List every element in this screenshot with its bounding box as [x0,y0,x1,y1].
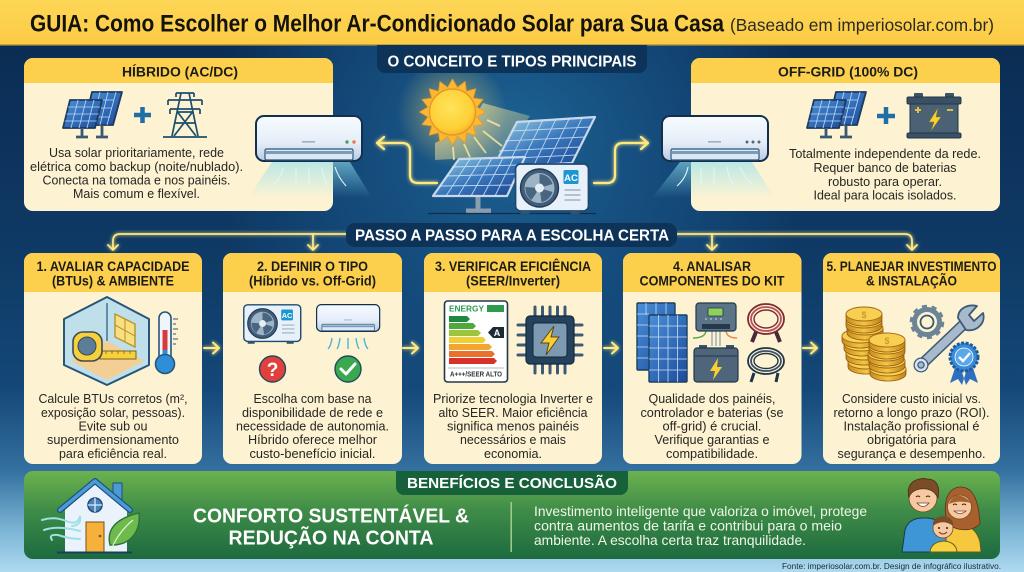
icon: black cable [748,348,784,382]
text: off-grid description: robusto para operar. [828,174,942,189]
text: step 4 description: Qualidade dos painéis, [648,391,776,406]
text: step 3 description: alto SEER. Maior eficiência [438,405,588,420]
title bar: (Baseado em imperiosolar.com.br) [730,15,994,35]
text: step 3 description: economia. [484,446,542,461]
text: step 5 description: Considere custo inicial vs. [842,391,981,406]
text: hybrid description: Usa solar prioritariamente, rede [49,145,224,160]
text: step 1 description: para eficiência real. [59,446,167,461]
icon: outdoor unit [244,305,301,344]
text: benefits description: ambiente. A escolha certa traz tranquilidade. [534,532,806,548]
panel: hybrid [24,58,333,211]
icon: energy label: ENERGY [449,304,484,314]
text: step 1 description [38,391,188,461]
text: step 1 description: Evite sub ou [78,418,148,434]
icon: hybrid air conditioner with airflow [248,116,372,198]
text: benefits description: contra aumentos de tarifa e contribui para o meio [534,518,842,534]
icon: coin stacks: $ [884,336,890,346]
panel: step 4: 4. ANALISAR [673,259,751,275]
section heading: step by step: PASSO A PASSO PARA A ESCOLHA CERTA [355,228,669,244]
panel: benefits and conclusion [24,471,1000,559]
icon: plus [877,107,895,124]
section heading: concept: O CONCEITO E TIPOS PRINCIPAIS [388,54,637,70]
heading: benefits [396,471,628,495]
panel: step 3: (SEER/Inverter) [466,274,560,290]
text: benefits description: Investimento inteligente que valoriza o imóvel, protege [534,503,867,519]
icon: inverter chip [518,307,582,373]
section heading: step by step [346,223,677,247]
heading: comfort: CONFORTO SUSTENTÁVEL & [193,504,469,528]
panel: step 1: (BTUs) & AMBIENTE [52,274,174,290]
icon: transmission tower [163,93,207,137]
panel: step 2 [223,253,402,464]
arrow: sun system to hybrid AC [377,137,437,183]
text: step 1 description: Calcule BTUs corretos (m², [38,391,188,406]
icon: battery [907,93,961,138]
text: step 4 description: compatibilidade. [666,446,758,461]
icon: indoor unit [317,305,380,349]
panel: step 2: 2. DEFINIR O TIPO [257,259,368,275]
panel: step 1: 1. AVALIAR CAPACIDADE [36,259,190,275]
icon: coin stacks: $ [861,310,867,320]
icon: thermometer [156,312,178,374]
icon: red cable [748,304,784,342]
text: hybrid description: Mais comum e flexível. [73,186,200,201]
text: step 5 description: Instalação profissional é [844,418,980,434]
text: step 4 description: controlador e baterias (se [640,405,784,420]
text: step 4 description: off-grid) é crucial. [662,418,762,434]
icon: energy label: A [494,328,501,338]
text: step 2 description: custo-benefício inicial. [250,446,376,461]
icon: sun [420,79,486,145]
panel: step 1 [24,253,202,464]
icon: coin stacks [842,307,906,381]
icon: room with measuring tape [64,297,149,385]
panel: step 2: (Híbrido vs. Off-Grid) [249,274,376,290]
icon: solar panels [63,92,122,137]
text: step 5 description: obrigatória para [867,432,957,447]
section heading: concept [377,45,647,73]
text: step 2 description [236,391,389,461]
text: hybrid description [30,145,243,201]
panel: step 4 [623,253,802,464]
heading: comfort [193,504,469,550]
icon: check mark [335,356,361,382]
text: step 3 description [433,391,593,461]
panel: step 4: COMPONENTES DO KIT [640,274,785,290]
icon: solar panels [807,92,866,137]
source note: Fonte: imperiosolar.com.br. Design de infográfico ilustrativo. [782,561,1001,571]
text: step 4 description [640,391,784,461]
text: off-grid description: Requer banco de baterias [814,160,957,175]
icon: energy label [444,301,508,382]
text: step 2 description: Híbrido oferece melhor [248,432,378,447]
text: step 5 description: retorno a longo prazo (ROI). [834,405,990,420]
icon: wrench [916,306,984,370]
icon: rear solar panel [493,117,595,168]
text: step 1 description: superdimensionamento [47,432,179,447]
text: step 2 description: disponibilidade de rede e [242,405,383,420]
icon: plus [134,107,151,123]
text: step 3 description: Priorize tecnologia Inverter e [433,391,593,406]
icon: house with leaf [42,481,139,552]
panel: off-grid: OFF-GRID (100% DC) [778,64,918,80]
text: hybrid description: elétrica como backup (noite/nublado). [30,159,243,174]
text: step 5 description [834,391,990,461]
heading: comfort: REDUÇÃO NA CONTA [228,526,434,550]
text: step 3 description: significa menos painéis [447,418,579,434]
text: off-grid description [789,146,981,202]
icon: energy label: A+++/SEER ALTO [450,372,502,378]
icon: gear [912,306,942,338]
icon: outdoor unit [516,164,588,214]
text: step 3 description: necessários e mais [460,432,566,447]
icon: question mark [260,356,286,382]
text: benefits description [534,503,867,548]
text: step 2 description: necessidade de autonomia. [236,418,389,434]
text: hybrid description: Conecta na tomada e nos painéis. [42,172,230,188]
text: step 4 description: Verifique garantias e [654,432,770,447]
title bar [0,0,1024,46]
arrow: sun system to off-grid AC [594,137,648,183]
panel: off-grid [691,58,1000,211]
sun beams [435,103,530,160]
icon: front solar panel [428,157,596,214]
panel: step 3 [424,253,602,464]
icon: solar modules [637,303,687,382]
panel: step 5: 5. PLANEJAR INVESTIMENTO [826,259,996,275]
text: step 2 description: Escolha com base na [254,391,372,406]
icon: charge controller [693,303,737,346]
icon: battery [694,345,738,382]
connector: yellow lines to steps [108,234,917,250]
title bar: GUIA: Como Escolher o Melhor Ar-Condicionado Solar para Sua Casa [30,10,725,38]
arrows: between steps [204,342,817,354]
text: off-grid description: Totalmente independente da rede. [789,146,981,161]
text: step 5 description: segurança e desempenho. [838,446,986,461]
panel: step 5 [823,253,1000,464]
panel: hybrid: HÍBRIDO (AC/DC) [122,64,238,80]
icon: family [902,479,981,552]
icon: off-grid air conditioner with airflow [652,116,775,198]
text: step 1 description: exposição solar, pessoas). [41,405,185,420]
central illustration: sun and solar system [390,55,596,214]
panel: step 3: 3. VERIFICAR EFICIÊNCIA [435,257,591,275]
text: off-grid description: Ideal para locais isolados. [814,188,956,202]
panel: step 5: & INSTALAÇÃO [866,272,957,290]
icon: question mark: ? [267,360,278,381]
heading: benefits: BENEFÍCIOS E CONCLUSÃO [407,474,617,492]
icon: quality badge [950,343,978,385]
